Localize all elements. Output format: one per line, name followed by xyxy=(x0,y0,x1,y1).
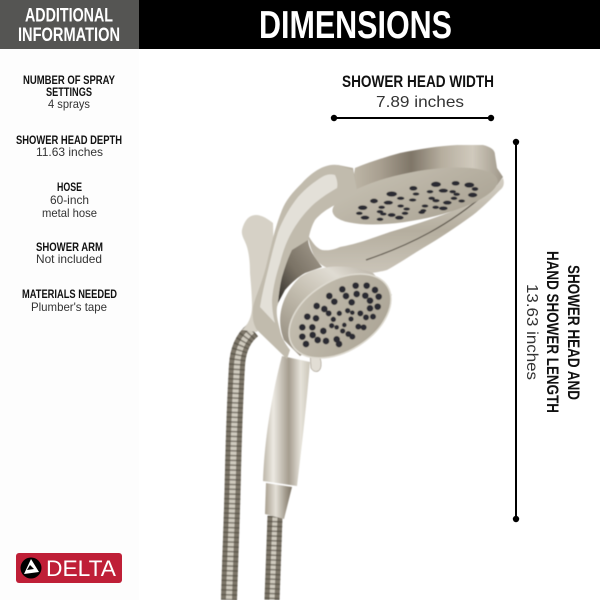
info: shower arm: Not included xyxy=(36,252,102,266)
bracket dark inner shadow xyxy=(278,240,322,303)
info: shower arm: SHOWER ARM xyxy=(36,240,103,254)
info: materials needed xyxy=(22,287,117,314)
width dimension line xyxy=(331,115,494,121)
overhead head face xyxy=(328,156,502,236)
left information panel background xyxy=(0,49,139,600)
shower head and hand shower length label xyxy=(523,251,583,413)
info: hose: metal hose xyxy=(42,206,97,220)
hand shower back ring xyxy=(280,266,392,356)
logo: Delta xyxy=(16,553,122,583)
hand shower handle xyxy=(263,356,310,486)
info: hose: HOSE xyxy=(57,180,82,194)
shower head and hand shower length label: HAND SHOWER LENGTH xyxy=(543,251,562,413)
shower head width label: SHOWER HEAD WIDTH xyxy=(342,72,494,91)
product: shower head illustration xyxy=(229,145,504,600)
info: shower head depth: 11.63 inches xyxy=(36,145,103,159)
header: dimensions: DIMENSIONS xyxy=(259,4,452,47)
shower head width label xyxy=(342,72,494,111)
shower head and hand shower length label: 13.63 inches xyxy=(523,284,540,380)
curved mounting bracket xyxy=(253,165,357,359)
shower head width label: 7.89 inches xyxy=(376,94,464,111)
info: hose: 60-inch xyxy=(50,193,89,207)
info: number of spray settings: SETTINGS xyxy=(46,85,92,99)
hand shower face xyxy=(274,257,406,375)
info: number of spray settings: NUMBER OF SPRAY xyxy=(23,73,115,87)
bracket highlight strip xyxy=(260,174,337,323)
info: shower head depth: SHOWER HEAD DEPTH xyxy=(16,133,122,147)
handle collar xyxy=(265,483,292,519)
header: additional information: ADDITIONAL xyxy=(25,6,113,26)
info: number of spray settings: 4 sprays xyxy=(48,97,90,111)
spray selector tab xyxy=(310,352,321,372)
logo: Delta: DELTA xyxy=(46,556,116,581)
hose: left metal hose xyxy=(229,330,253,600)
info: shower head depth xyxy=(16,133,122,159)
header: additional information xyxy=(0,0,139,49)
header: dimensions xyxy=(139,0,600,49)
arm lip line xyxy=(366,192,487,260)
info: shower arm xyxy=(36,240,103,266)
info: materials needed: MATERIALS NEEDED xyxy=(22,287,117,301)
overhead head nozzles xyxy=(356,181,478,221)
info: hose xyxy=(42,180,97,220)
head collar xyxy=(338,165,357,196)
length dimension line xyxy=(513,139,519,522)
shower head and hand shower length label: SHOWER HEAD AND xyxy=(564,265,583,400)
overhead head rim xyxy=(350,145,503,205)
info: number of spray settings xyxy=(23,73,115,111)
hand shower nozzles xyxy=(299,282,382,347)
arm band xyxy=(308,178,504,274)
connector stub xyxy=(242,215,275,332)
info: materials needed: Plumber's tape xyxy=(31,300,107,314)
header: additional information: INFORMATION xyxy=(18,25,120,46)
hose: lower metal hose xyxy=(272,516,275,600)
